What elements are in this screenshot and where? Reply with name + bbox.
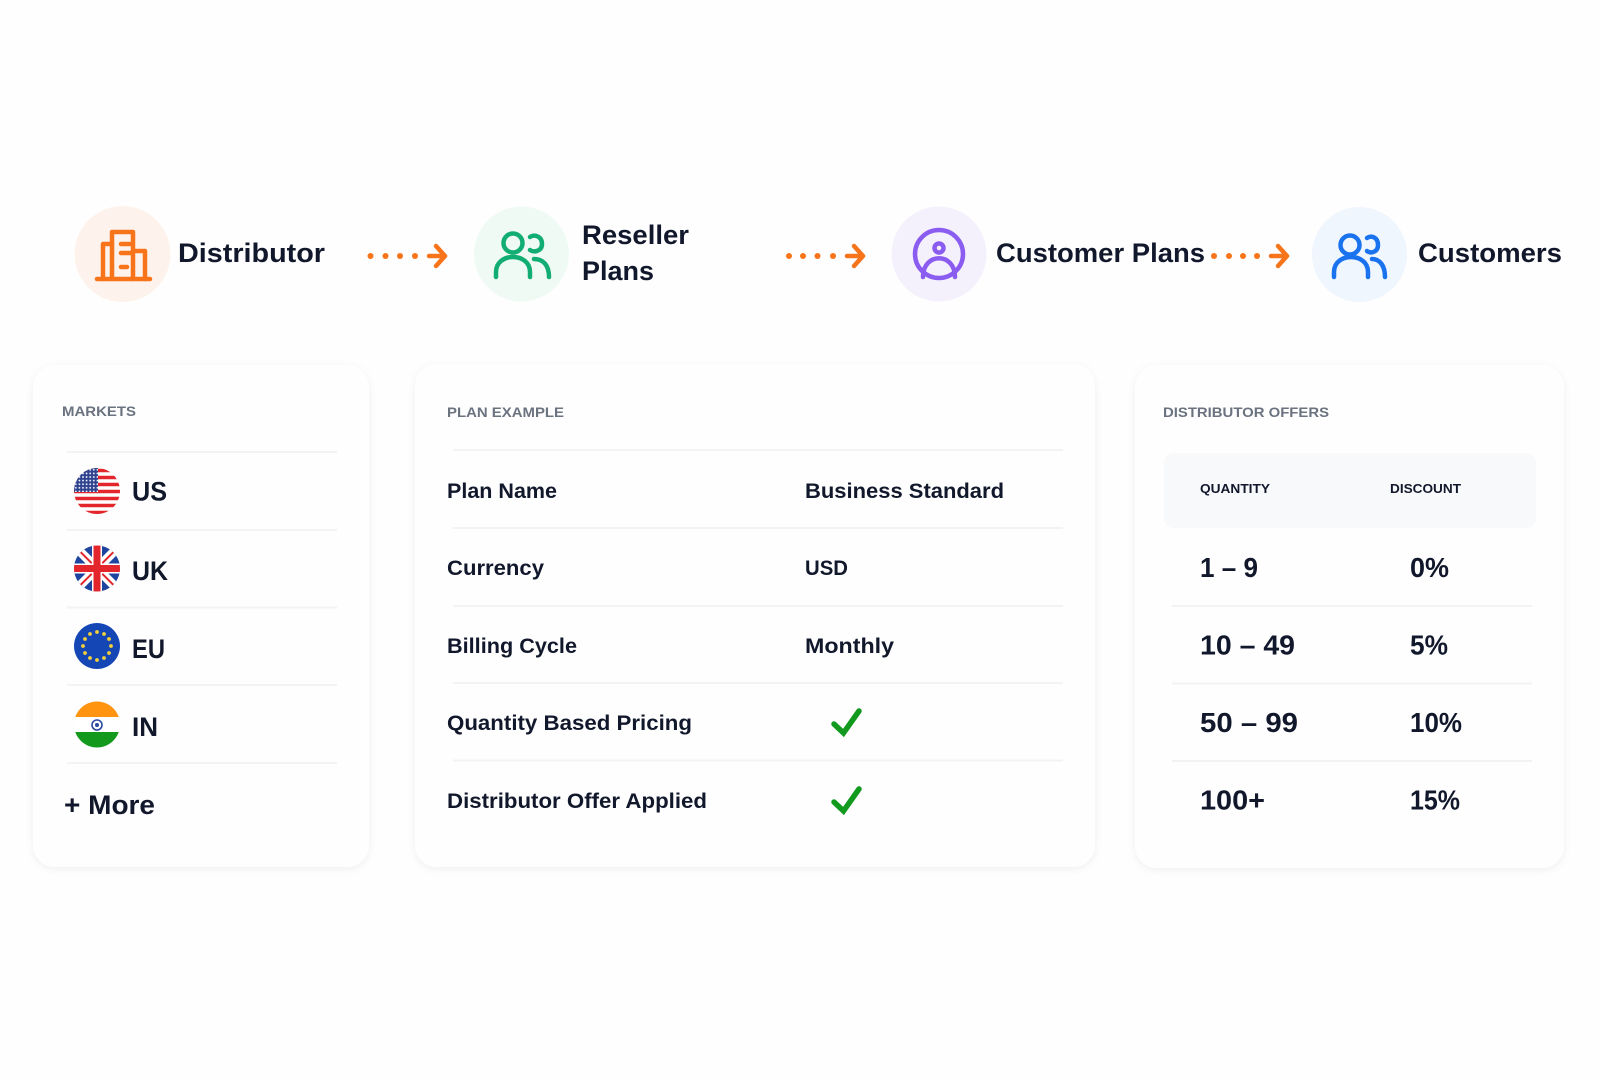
icon: UK flag [74, 545, 120, 592]
table header: QUANTITY [1200, 481, 1270, 496]
row: 1-9: 0% [1410, 552, 1449, 583]
heading: plan example: PLAN EXAMPLE [447, 404, 564, 420]
icon: blue people [1312, 207, 1407, 302]
row: 1-9 [1200, 552, 1449, 583]
step: Customer Plans [892, 206, 1205, 302]
label: Customers: Customers [1418, 238, 1562, 268]
icon: building [74, 206, 170, 302]
table header [1164, 453, 1536, 528]
row: 10-49 [1200, 630, 1448, 660]
row: distributor offer applied [447, 789, 859, 813]
row: distributor offer applied: Distributor Offer Applied [447, 789, 707, 813]
heading: distributor offers: DISTRIBUTOR OFFERS [1163, 404, 1329, 420]
row: 1-9: 1 – 9 [1200, 552, 1258, 583]
arrow 3 [1211, 246, 1287, 266]
icon: purple user [892, 206, 986, 302]
row: currency: USD [805, 556, 848, 580]
label: Reseller Plans [582, 220, 689, 286]
row: quantity based pricing [447, 711, 859, 735]
row: billing cycle: Billing Cycle [447, 634, 577, 658]
market: UK [74, 545, 168, 592]
panel: markets [40, 406, 362, 868]
row: 10-49: 5% [1410, 630, 1448, 660]
row: 50-99: 10% [1410, 707, 1462, 738]
label: EU: EU [132, 634, 165, 664]
row: billing cycle [447, 634, 894, 658]
icon: check [834, 711, 859, 733]
arrow 1 [368, 246, 445, 266]
row: 50-99: 50 – 99 [1200, 707, 1298, 738]
label: IN: IN [132, 712, 158, 742]
row: quantity based pricing: Quantity Based Pricing [447, 711, 692, 735]
label: UK: UK [132, 556, 168, 586]
icon: India flag [74, 701, 120, 748]
label: Customer Plans: Customer Plans [996, 238, 1205, 268]
table header: DISCOUNT [1390, 481, 1461, 496]
panel: distributor offers [1135, 365, 1564, 868]
label: US: US [132, 476, 167, 506]
row: 100+ [1200, 784, 1460, 816]
row: plan name: Plan Name [447, 479, 557, 503]
row: currency: Currency [447, 556, 544, 580]
step: Reseller Plans [474, 206, 689, 302]
arrow 2 [786, 246, 863, 266]
panel: plan example [415, 364, 1095, 867]
row: billing cycle: Monthly [805, 634, 894, 658]
icon: check [834, 789, 859, 811]
row: 100+: 100+ [1200, 784, 1265, 816]
step: Customers [1312, 207, 1562, 302]
label: Distributor: Distributor [178, 238, 326, 268]
market: EU [74, 623, 165, 669]
label: Reseller Plans: Plans [582, 256, 654, 286]
icon: US flag [74, 468, 120, 514]
label: Reseller Plans: Reseller [582, 220, 689, 250]
icon: green people [474, 206, 569, 302]
step: Distributor [74, 206, 326, 302]
row: 50-99 [1200, 707, 1462, 738]
more: + More [64, 790, 155, 820]
market: IN [74, 701, 158, 748]
row: 100+: 15% [1410, 784, 1460, 816]
row: 10-49: 10 – 49 [1200, 630, 1295, 660]
row: plan name: Business Standard [805, 479, 1004, 503]
heading: markets: MARKETS [62, 403, 136, 419]
icon: EU flag [74, 623, 120, 669]
flow row [74, 206, 1562, 302]
row: currency [447, 556, 848, 580]
market: US [74, 468, 167, 514]
row: plan name [447, 479, 1004, 503]
